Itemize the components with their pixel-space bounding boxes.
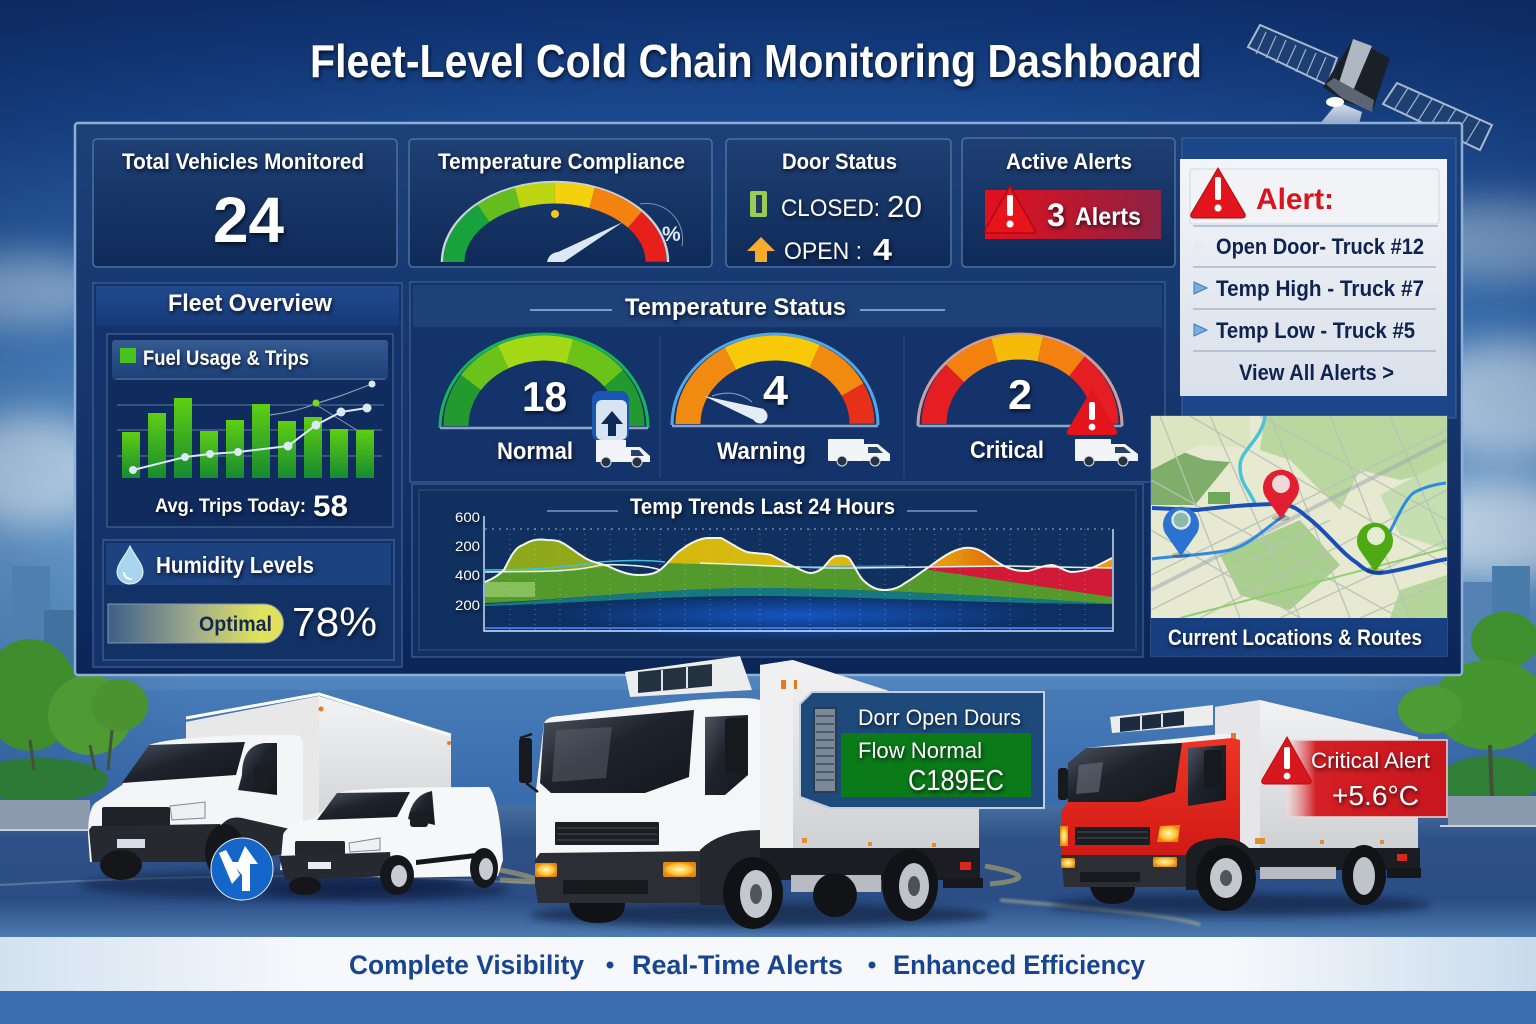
left trees [0,639,148,802]
panel: alert list: Temp Low - Truck #5 [1216,318,1415,343]
card: door status: 4 [873,232,893,267]
right trees [1398,612,1536,804]
icon: water drop [117,546,143,584]
panel: humidity levels: Optimal [199,613,272,636]
gauge: critical [918,334,1138,466]
callout: door status sign: Dorr Open Dours [858,705,1021,730]
vehicle: red refrigerated truck [1050,700,1430,916]
refrigeration unit [1110,705,1213,733]
gauge: critical: 2 [1008,371,1032,418]
callout: critical alert sign [1262,737,1447,817]
callout: door status sign: C189EC [908,765,1004,797]
card: temperature compliance gauge: Temperature Compliance [438,149,685,174]
card: door status: CLOSED: [781,195,880,222]
icon: up arrow badge [592,391,629,441]
icon: small truck [828,439,890,466]
icon: alert triangle [1262,737,1311,784]
vehicle: white box truck [80,694,460,899]
panel: fuel usage and trips: Fuel Usage & Trips [143,347,309,370]
card: door status [726,139,951,267]
card: temperature compliance gauge [409,139,712,267]
bar chart [122,398,374,478]
panel: temp trends: 400 [455,567,480,583]
panel: temp trends: 200 [455,597,480,613]
icon: red pin [1263,470,1299,521]
panel: map with routes [1151,416,1447,656]
card: total vehicles monitored: Total Vehicles Monitored [122,149,364,174]
panel: temp trends: Temp Trends Last 24 Hours [630,494,895,519]
icon: direction sign [211,838,273,900]
icon: red warning [1067,389,1117,435]
panel: alert list: Temp High - Truck #7 [1216,276,1424,301]
icon: blue pin [1163,507,1199,558]
callout: critical alert sign: Critical Alert [1311,748,1430,773]
panel: temperature status [410,282,1165,482]
card: door status: 20 [887,189,922,224]
card: temperature compliance gauge: % [662,223,681,246]
gauge: warning: Warning [717,438,806,465]
icon: open arrow [747,237,775,262]
area chart [484,516,1113,641]
icon: closed door [750,191,767,217]
tagline band: Real-Time Alerts [632,950,843,980]
card: door status: Door Status [782,149,897,174]
panel: fleet overview: Fleet Overview [168,290,333,317]
panel: temp trends: 200 [455,538,480,554]
card: active alerts: Alerts [1075,203,1141,231]
card: active alerts [962,138,1175,267]
gauge: warning: 4 [763,367,789,414]
icon: alert triangle [1191,168,1245,218]
tagline band: Enhanced Efficiency [893,950,1145,980]
gauge: warning [672,334,890,466]
panel: fuel usage and trips [107,334,393,527]
dashboard frame [75,123,1462,675]
icon: satellite [1248,25,1492,162]
gauge: normal: 18 [522,373,567,420]
tagline band [0,937,1536,991]
callout: door status sign: Flow Normal [858,738,982,763]
icon: small truck [596,440,650,467]
icon: warning triangle [985,186,1035,233]
card: active alerts: 3 [1047,197,1065,233]
card: total vehicles monitored [93,139,397,267]
panel: fleet overview [93,283,402,667]
icon: small truck [1075,439,1138,466]
icon: green pin [1357,523,1393,574]
callout: door status sign [800,692,1044,808]
panel: alert list: Alert: [1256,183,1334,216]
card: total vehicles monitored: 24 [213,184,284,256]
title: Fleet-Level Cold Chain Monitoring Dashboard [310,35,1202,87]
refrigeration unit [625,656,752,697]
callout: critical alert sign: +5.6°C [1332,780,1419,811]
panel: humidity levels: Humidity Levels [156,552,314,578]
panel: map with routes: Current Locations & Routes [1168,625,1422,650]
card: active alerts: Active Alerts [1006,149,1132,174]
panel: humidity levels: 78% [292,599,377,645]
vehicle: large white refrigerated truck [519,656,990,929]
map [1151,416,1447,618]
card: door status: OPEN : [784,238,862,265]
panel: temperature status: Temperature Status [625,294,846,321]
vehicle: white van [270,787,510,900]
panel: alert list [1180,138,1456,418]
gauge: normal [440,334,650,467]
panel: humidity levels [103,540,394,660]
panel: alert list: View All Alerts > [1239,360,1394,385]
gauge: normal: Normal [497,438,573,465]
line chart: trips [129,380,376,474]
panel: temp trends: 600 [455,509,480,525]
panel: temp trends [412,484,1143,657]
panel: fuel usage and trips: Avg. Trips Today: [155,495,306,517]
panel: fuel usage and trips: 58 [313,490,348,523]
panel: alert list: Open Door- Truck #12 [1216,234,1424,259]
gauge: critical: Critical [970,437,1044,464]
tagline band: Complete Visibility [349,950,584,980]
